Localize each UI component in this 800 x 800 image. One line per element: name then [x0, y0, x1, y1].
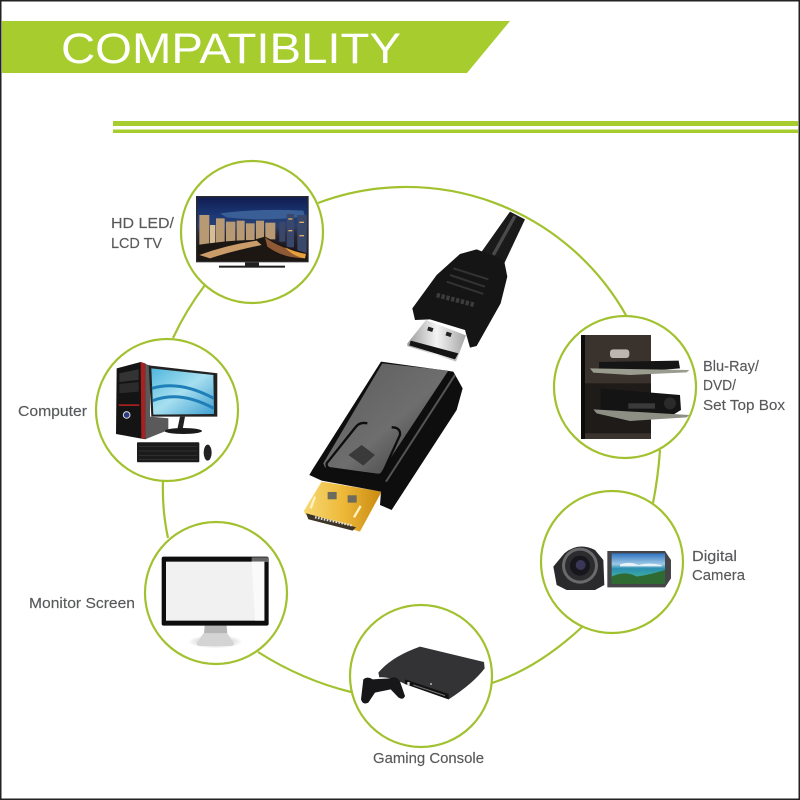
icon: game controller	[361, 677, 405, 703]
connecting ring	[163, 187, 660, 692]
circle: Blu-Ray player	[554, 316, 696, 458]
icon: camcorder	[553, 547, 671, 590]
plug metal shell	[407, 320, 466, 362]
icon: monitor	[162, 557, 269, 648]
circle: digital camera	[541, 491, 683, 633]
icon: desktop computer	[116, 362, 217, 462]
plug housing	[412, 249, 507, 348]
adapter top face	[323, 363, 448, 474]
label: Blu-Ray/DVD/Set Top Box: Set Top Box	[703, 397, 785, 414]
label: HD LED/LCD TV: HD LED/	[111, 215, 175, 232]
gold connector	[304, 482, 382, 532]
label: Gaming Console: Gaming Console	[373, 750, 484, 767]
double rule	[113, 121, 798, 133]
latch grip	[348, 445, 375, 466]
circle: gaming console	[350, 605, 492, 747]
label: HD LED/LCD TV: LCD TV	[111, 235, 162, 252]
adapter body	[309, 362, 463, 510]
circle: monitor screen	[145, 522, 287, 664]
label: Monitor Screen: Monitor Screen	[29, 595, 135, 612]
label: Digital Camera: Digital	[692, 548, 737, 565]
icon: game console	[361, 647, 485, 703]
label: Blu-Ray/DVD/Set Top Box: DVD/	[703, 377, 737, 394]
icon: television	[196, 196, 309, 268]
cable	[480, 212, 525, 264]
label: Digital Camera: Camera	[692, 567, 746, 584]
icon: media shelf	[581, 335, 689, 439]
title banner	[2, 21, 510, 73]
DisplayPort adapter	[304, 362, 463, 532]
circle: computer	[96, 339, 238, 481]
HDMI plug	[407, 212, 525, 362]
title text: COMPATIBLITY	[61, 25, 401, 73]
label: Computer: Computer	[18, 403, 87, 420]
label: Blu-Ray/DVD/Set Top Box: Blu-Ray/	[703, 358, 760, 375]
latch outline	[327, 423, 400, 475]
circle: HD TV	[181, 161, 323, 303]
